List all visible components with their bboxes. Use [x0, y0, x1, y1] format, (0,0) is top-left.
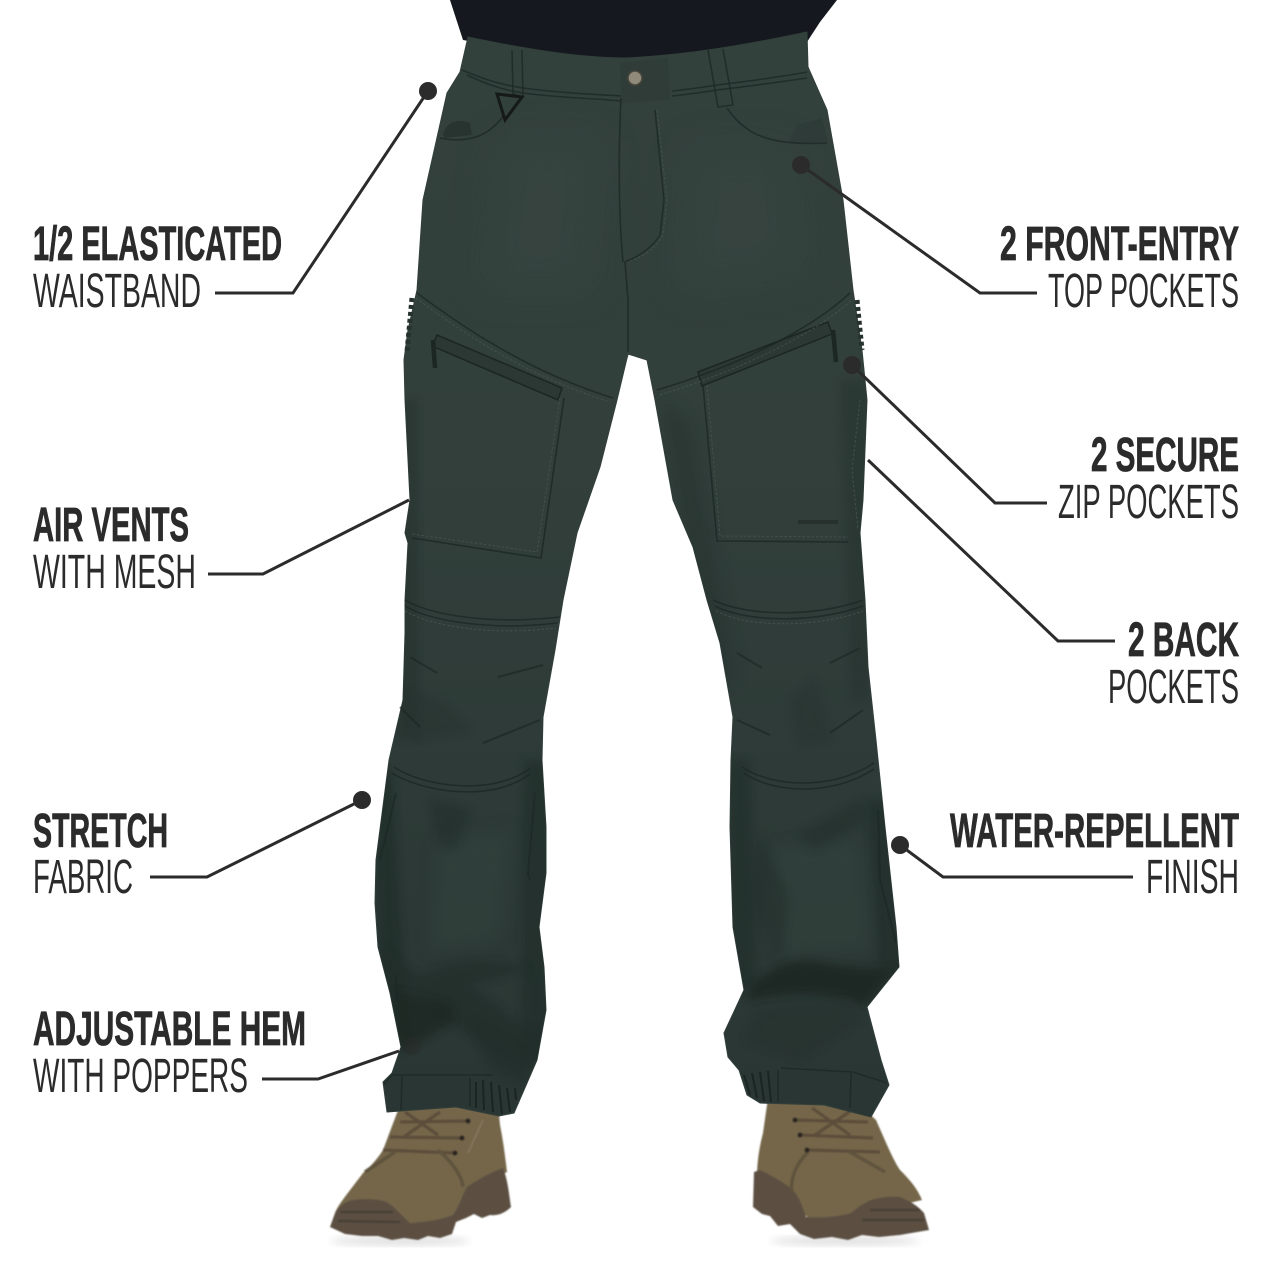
- callout: 1/2 elasticated waistband: WAISTBAND: [33, 265, 201, 318]
- black shirt: [450, 0, 837, 62]
- knee panels: [392, 600, 874, 792]
- callout: adjustable hem with poppers: [33, 1003, 399, 1103]
- D-ring: [497, 94, 522, 120]
- callout: stretch fabric: STRETCH: [33, 805, 168, 858]
- callout: adjustable hem with poppers: WITH POPPERS: [33, 1050, 248, 1103]
- fly: [619, 98, 667, 352]
- floor shadow: [330, 1237, 920, 1245]
- callout: adjustable hem with poppers: ADJUSTABLE HEM: [33, 1003, 306, 1056]
- trousers: [372, 32, 905, 1117]
- front pockets: [440, 108, 828, 143]
- faint marker on hem: [403, 1037, 421, 1055]
- fabric shading: [372, 140, 905, 1085]
- callout: air vents with mesh: AIR VENTS: [33, 499, 189, 552]
- waistband: [462, 49, 807, 107]
- callout: stretch fabric: FABRIC: [33, 851, 133, 904]
- left cargo pocket with zip: [407, 293, 613, 558]
- callout: stretch fabric: [33, 791, 371, 904]
- callout: 2 secure zip pockets: [843, 356, 1239, 529]
- callout: air vents with mesh: WITH MESH: [33, 546, 196, 599]
- fold: right lower leg: [748, 961, 897, 1005]
- callout: 1/2 elasticated waistband: [33, 82, 437, 318]
- wrinkle creases: [380, 648, 896, 1000]
- hem cuffs: [384, 1068, 887, 1114]
- callout: air vents with mesh: [33, 499, 409, 599]
- callout: 2 back pockets: [868, 460, 1239, 714]
- crotch shadow: [610, 350, 630, 378]
- left boot: [330, 1105, 511, 1240]
- callout: 2 front-entry top pockets: [792, 156, 1239, 318]
- leg logo: [798, 520, 838, 524]
- right boot: [753, 1098, 929, 1240]
- button: [628, 71, 642, 85]
- right cargo pocket with zip: [657, 293, 862, 542]
- callout: 1/2 elasticated waistband: 1/2 ELASTICATED: [33, 218, 282, 271]
- callout: water-repellent finish: [891, 805, 1239, 904]
- fold: left lower leg: [412, 966, 512, 1032]
